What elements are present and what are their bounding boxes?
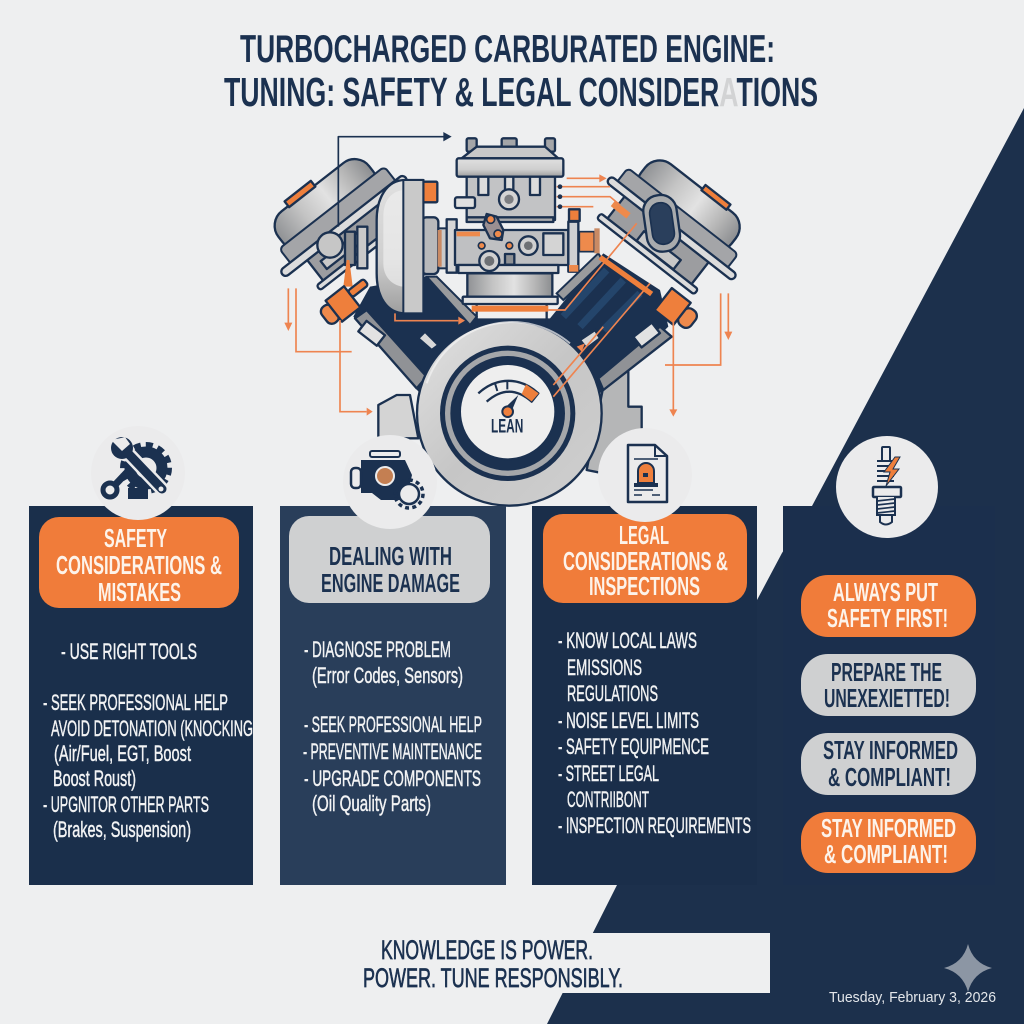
legal list: REGULATIONS	[567, 681, 658, 706]
footer banner: KNOWLEDGE IS POWER.	[381, 935, 593, 965]
title: TURBOCHARGED CARBURATED ENGINE:	[240, 28, 775, 71]
title	[224, 28, 818, 115]
left ball joint	[317, 227, 367, 287]
left cylinder head	[248, 134, 428, 303]
engine damage list: - DIAGNOSE PROBLEM	[304, 637, 451, 662]
engine damage heading pill: DEALING WITH	[329, 541, 452, 571]
reminder pill: stay informed grey: & COMPLIANT!	[828, 762, 951, 792]
gauge dial	[478, 381, 539, 417]
legal list: EMISSIONS	[567, 655, 642, 680]
legal list: - NOISE LEVEL LIMITS	[558, 708, 699, 733]
flow lines and arrows	[284, 132, 732, 417]
reminder pill: always put safety first	[801, 575, 976, 637]
engine damage list: - SEEK PROFESSIONAL HELP	[304, 712, 482, 737]
legal heading pill: LEGAL	[619, 520, 669, 550]
right cylinder head	[585, 136, 769, 308]
legal heading pill: INSPECTIONS	[589, 571, 700, 601]
safety list: - UPGNITOR OTHER PARTS	[43, 792, 209, 817]
engine damage list: - UPGRADE COMPONENTS	[304, 766, 481, 791]
icon: spark plug	[836, 436, 938, 538]
sparkle mark	[944, 944, 992, 992]
footer banner	[363, 933, 770, 993]
safety heading pill: CONSIDERATIONS &	[56, 550, 222, 580]
safety list: (Air/Fuel, EGT, Boost	[54, 741, 191, 766]
reminder pill: prepare the unexpected: PREPARE THE	[831, 657, 942, 687]
date: Tuesday, February 3, 2026	[829, 989, 996, 1006]
legal list: CONTRIIBONT	[567, 787, 649, 812]
carburetor	[447, 138, 600, 327]
safety list: - USE RIGHT TOOLS	[61, 639, 197, 664]
safety heading pill	[39, 517, 239, 608]
reminder pill: prepare the unexpected	[801, 654, 976, 716]
turbocharger	[377, 180, 455, 313]
icon: inspection document	[598, 428, 692, 522]
legal list: - KNOW LOCAL LAWS	[558, 628, 697, 653]
panel: engine damage	[280, 506, 506, 885]
reminder pill: stay informed orange: & COMPLIANT!	[824, 839, 948, 869]
reminder pill: stay informed grey	[801, 733, 976, 795]
safety heading pill: SAFETY	[104, 523, 167, 553]
engine damage heading pill: ENGINE DAMAGE	[321, 568, 460, 598]
engine damage heading pill	[289, 516, 490, 603]
engine damage list: (Oil Quality Parts)	[312, 791, 431, 816]
legal heading pill: CONSIDERATIONS &	[563, 546, 728, 576]
safety list: Boost Roust)	[53, 766, 136, 791]
safety heading pill: MISTAKES	[98, 577, 181, 607]
navy diagonal panel	[547, 108, 1024, 1024]
legal list: - SAFETY EQUIPMENCE	[558, 734, 709, 759]
legal list: - INSPECTION REQUIREMENTS	[558, 813, 751, 838]
right head oval port	[641, 193, 682, 254]
reminder pill: always put safety first: ALWAYS PUT	[833, 577, 938, 607]
engine block V	[353, 253, 672, 393]
safety list: - SEEK PROFESSIONAL HELP	[43, 690, 228, 715]
engine block lower castings	[378, 360, 642, 473]
engine illustration	[248, 132, 769, 506]
right orange bolt	[655, 288, 702, 334]
panel: safety considerations	[29, 506, 253, 885]
icon: wrench and gear	[91, 426, 185, 520]
legal list: - STREET LEGAL	[558, 761, 659, 786]
left orange bolt	[316, 274, 376, 329]
legal heading pill	[543, 514, 747, 603]
crankshaft pulley with lean gauge	[417, 321, 602, 506]
reminder pill: always put safety first: SAFETY FIRST!	[827, 603, 948, 633]
gauge label: LEAN	[491, 417, 523, 438]
panel: key reminders	[783, 506, 995, 885]
reminder pill: stay informed orange	[801, 812, 976, 873]
icon: engine and gear	[343, 435, 437, 529]
title: TUNING: SAFETY & LEGAL CONSIDERATIONS	[224, 69, 818, 115]
safety list: AVOID DETONATION (KNOCKING	[51, 716, 253, 741]
panel: legal considerations	[532, 506, 757, 885]
safety list	[43, 639, 253, 842]
engine damage list: (Error Codes, Sensors)	[312, 663, 463, 688]
engine damage list	[303, 637, 482, 816]
engine damage list: - PREVENTIVE MAINTENANCE	[303, 739, 482, 764]
legal list	[558, 628, 751, 838]
safety list: (Brakes, Suspension)	[53, 817, 191, 842]
footer banner: POWER. TUNE RESPONSIBLY.	[363, 963, 623, 993]
